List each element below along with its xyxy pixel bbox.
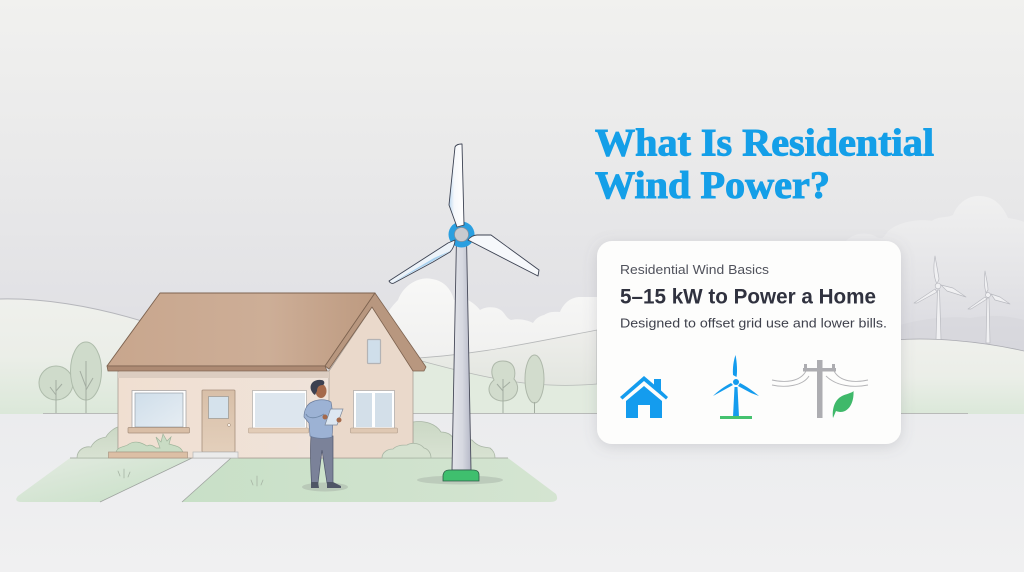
middle front hill bbox=[400, 355, 597, 414]
icon: house bbox=[620, 376, 668, 418]
right oval tree bbox=[525, 355, 544, 413]
left hill outline bbox=[0, 299, 145, 322]
right hill bbox=[895, 339, 1024, 414]
back bush left bbox=[77, 427, 118, 458]
horizon lines bbox=[43, 412, 968, 414]
gable side window bbox=[350, 390, 398, 433]
planter box bbox=[108, 452, 188, 458]
title bbox=[595, 122, 934, 207]
hub cap bbox=[454, 228, 468, 242]
sky background bbox=[0, 0, 1024, 420]
sweater bbox=[304, 400, 333, 438]
distant ridge bbox=[900, 316, 1024, 352]
tower bbox=[452, 238, 471, 470]
hands bbox=[322, 414, 342, 422]
right hill outline bbox=[895, 339, 1024, 351]
background clouds behind turbine bbox=[378, 278, 597, 380]
upper blade bbox=[449, 144, 464, 227]
blade accent bbox=[392, 251, 450, 283]
card label: Residential Wind Basics bbox=[620, 262, 770, 277]
door bbox=[202, 390, 235, 452]
distant turbine two bbox=[968, 271, 1010, 343]
house bbox=[107, 293, 426, 458]
arm bbox=[306, 414, 324, 418]
right round tree bbox=[489, 361, 518, 413]
person shadow bbox=[302, 482, 348, 492]
turbine shadow bbox=[417, 476, 503, 484]
roof fascia bbox=[107, 366, 327, 371]
turbine base bbox=[443, 470, 479, 481]
left oval tree bbox=[70, 342, 102, 413]
house wall bbox=[118, 371, 330, 458]
lawn top line bbox=[70, 457, 508, 459]
front window middle bbox=[248, 390, 308, 433]
clipboard bbox=[325, 409, 343, 425]
icon: small wind turbine bbox=[713, 355, 759, 419]
ground bbox=[0, 414, 1024, 572]
middle front hill outline bbox=[400, 355, 597, 385]
main roof bbox=[107, 293, 375, 366]
front window left bbox=[128, 390, 190, 433]
card background bbox=[597, 241, 901, 444]
door step bbox=[193, 452, 238, 458]
icon: utility pole with leaf bbox=[772, 360, 868, 418]
legs bbox=[310, 436, 333, 483]
wind turbine bbox=[389, 144, 539, 484]
bush beside person bbox=[382, 443, 431, 458]
left blade bbox=[389, 240, 455, 283]
grass tufts bbox=[118, 469, 263, 486]
left round tree bbox=[39, 366, 73, 413]
eave shadow bbox=[118, 372, 329, 378]
shoes bbox=[311, 482, 341, 488]
title line two: Wind Power? bbox=[595, 164, 830, 207]
right lawn bbox=[182, 458, 557, 502]
person bbox=[304, 380, 343, 488]
left lawn bbox=[16, 458, 192, 502]
hub ring bbox=[448, 222, 474, 248]
distant turbine one bbox=[914, 256, 966, 340]
title line one: What Is Residential bbox=[595, 122, 934, 164]
card description: Designed to offset grid use and lower bills. bbox=[620, 316, 887, 330]
walkway edges bbox=[100, 458, 231, 502]
planter bush bbox=[116, 434, 183, 452]
gable trim bbox=[325, 293, 426, 371]
background clouds on the right bbox=[845, 196, 1024, 350]
hair bbox=[311, 380, 324, 395]
info card bbox=[597, 241, 901, 444]
gable wall bbox=[329, 307, 413, 458]
head bbox=[316, 384, 326, 398]
middle back hill bbox=[400, 330, 597, 400]
left hill bbox=[0, 299, 145, 414]
bush right of house bbox=[413, 421, 495, 458]
right blade bbox=[468, 235, 539, 276]
card heading: 5–15 kW to Power a Home bbox=[620, 286, 876, 308]
gable window bbox=[368, 340, 380, 364]
